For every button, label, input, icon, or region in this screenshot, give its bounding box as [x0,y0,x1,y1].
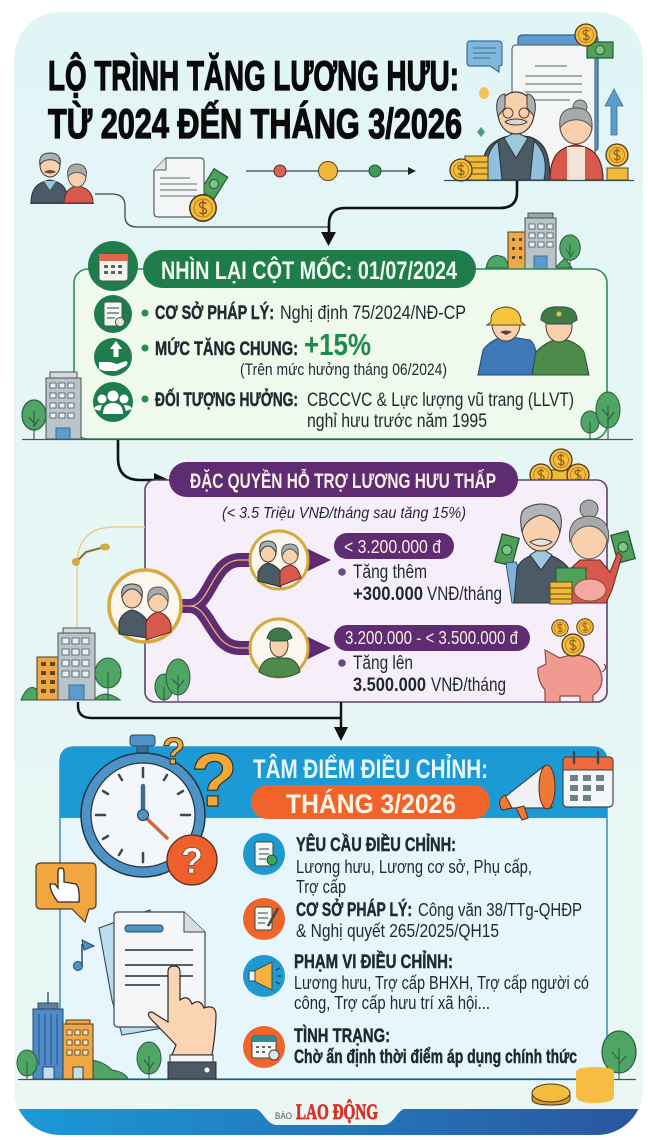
illustration: piggy bank [538,619,606,702]
text: add 300,000: VNĐ/tháng [427,584,502,605]
item: status [243,1025,577,1068]
coin stacks beside couple [450,144,628,181]
logo: Báo Lao Động [275,1099,378,1124]
icon: stopwatch with question marks: ? [162,731,185,773]
icon: calendar [88,241,138,291]
logo: Báo Lao Động: BÁO [275,1111,292,1122]
panel: low pension privileges [109,462,635,702]
item: legal basis [243,898,582,941]
text: general raise +15%: (Trên mức hưởng tháng 06/2024) [240,360,447,379]
text: add 300,000: Tăng thêm [353,562,427,583]
branching purple arrows [178,548,331,660]
item: adjustment scope [243,951,589,1013]
heading pill: NHÌN LẠI CỘT MỐC: 01/07/2024 [161,255,457,285]
item: adjustment scope: công, Trợ cấp hưu trí xã hội... [294,993,490,1013]
trees in purple panel [155,659,190,701]
icon: blue up arrow [605,89,623,135]
illustration: left building and trees at green panel [22,372,81,439]
item: adjustment requirement [243,833,532,897]
pill: 3.2 to 3.5 million [334,625,530,651]
panel: milestone 01/07/2024 [74,241,607,439]
text: beneficiaries [142,389,574,432]
icon: stopwatch with question marks: ? [191,738,237,823]
icon: hand pointing in speech bubble [36,863,96,922]
item: adjustment requirement: Trợ cấp [296,877,346,897]
pill: March 2026: THÁNG 3/2026 [286,788,456,819]
footer band [14,1109,643,1136]
text: legal basis [142,302,466,324]
text: general raise +15%: MỨC TĂNG CHUNG: [155,338,298,360]
icon: chat bubble [467,41,502,72]
pill: March 2026 [251,785,490,819]
icon: stopwatch with question marks: ? [181,840,203,881]
item: adjustment requirement: YÊU CẦU ĐIỀU CHỈNH: [296,834,456,856]
item: legal basis: CƠ SỞ PHÁP LÝ: [296,899,412,921]
tree right bottom [602,1031,636,1079]
text: raise to 3,500,000 [338,653,506,696]
illustration: bottom left city [17,992,161,1079]
panel: focus March 2026 [60,731,613,1079]
text: add 300,000: +300.000 [353,584,423,605]
illustration: worker and soldier [478,307,589,375]
text: legal basis: CƠ SỞ PHÁP LÝ: [155,302,274,324]
heading text: TÂM ĐIỂM ĐIỀU CHỈNH: [253,752,488,784]
icon: calendar [563,752,613,807]
ground line bottom [18,1078,636,1080]
title [48,51,462,147]
medallion: couple [109,570,181,642]
illustration: happy couple with money [495,500,635,604]
icon: group of people [93,382,133,422]
pill: 3.2 to 3.5 million: 3.200.000 - < 3.500.000 đ [345,628,518,648]
text: general raise +15%: +15% [304,327,371,362]
timeline with dots [246,162,416,180]
icon: stopwatch with question marks [81,731,237,885]
item: legal basis: & Nghị quyết 265/2025/QH15 [296,921,499,941]
text: general raise +15% [142,327,447,379]
icon: raise hand [94,338,132,376]
trees right of green panel [581,392,620,439]
ground line mid [22,438,633,440]
icon: legal document [94,295,132,333]
icon: megaphone [500,765,555,820]
logo: Báo Lao Động: LAO ĐỘNG [296,1099,378,1124]
text: raise to 3,500,000: 3.500.000 [353,675,426,696]
illustration: document with pointing hand [99,910,216,1079]
illustration: buildings top [486,213,580,269]
icon: music note [74,940,94,970]
ground line top [444,180,634,182]
item: adjustment scope: PHẠM VI ĐIỀU CHỈNH: [294,951,453,973]
item: legal basis: Công văn 38/TTg-QHĐP [418,900,582,920]
arrow: to March 2026 panel [78,702,348,741]
heading pill: ĐẶC QUYỀN HỖ TRỢ LƯƠNG HƯU THẤP [190,469,496,493]
arrow: milestone to low pension panel [118,440,169,487]
connector thin line [95,194,328,227]
text: legal basis: Nghị định 75/2024/NĐ-CP [280,303,466,324]
text: raise to 3,500,000: VNĐ/tháng [431,675,506,696]
medallion: soldier [250,619,308,677]
item: adjustment requirement: Lương hưu, Lương cơ sở, Phụ cấp, [296,857,532,877]
document with money icon [154,158,228,221]
text: beneficiaries: CBCCVC & Lực lượng vũ trang (LLVT) [307,390,574,411]
heading pill [169,462,518,497]
illustration: left buildings and crane [21,527,145,700]
small couple icon [30,153,94,204]
medallion: couple small [250,531,308,589]
heading pill [143,250,476,288]
title: TỪ 2024 ĐẾN THÁNG 3/2026 [48,99,462,147]
subtitle: (< 3.5 Triệu VNĐ/tháng sau tăng 15%) [222,505,466,522]
icon: coins above purple panel [530,449,589,486]
text: beneficiaries: ĐỐI TƯỢNG HƯỞNG: [155,389,298,411]
item: status: TÌNH TRẠNG: [294,1025,390,1047]
icon: gold coins bottom [532,1067,614,1105]
illustration: large retired couple with document [481,24,613,180]
pill: under 3.2 million: < 3.200.000 đ [344,537,441,557]
text: beneficiaries: nghỉ hưu trước năm 1995 [307,411,487,432]
arrow: couple to milestone [321,181,517,246]
text: add 300,000 [338,562,502,605]
decorative dot and diamond [477,87,489,137]
text: raise to 3,500,000: Tăng lên [353,653,413,674]
